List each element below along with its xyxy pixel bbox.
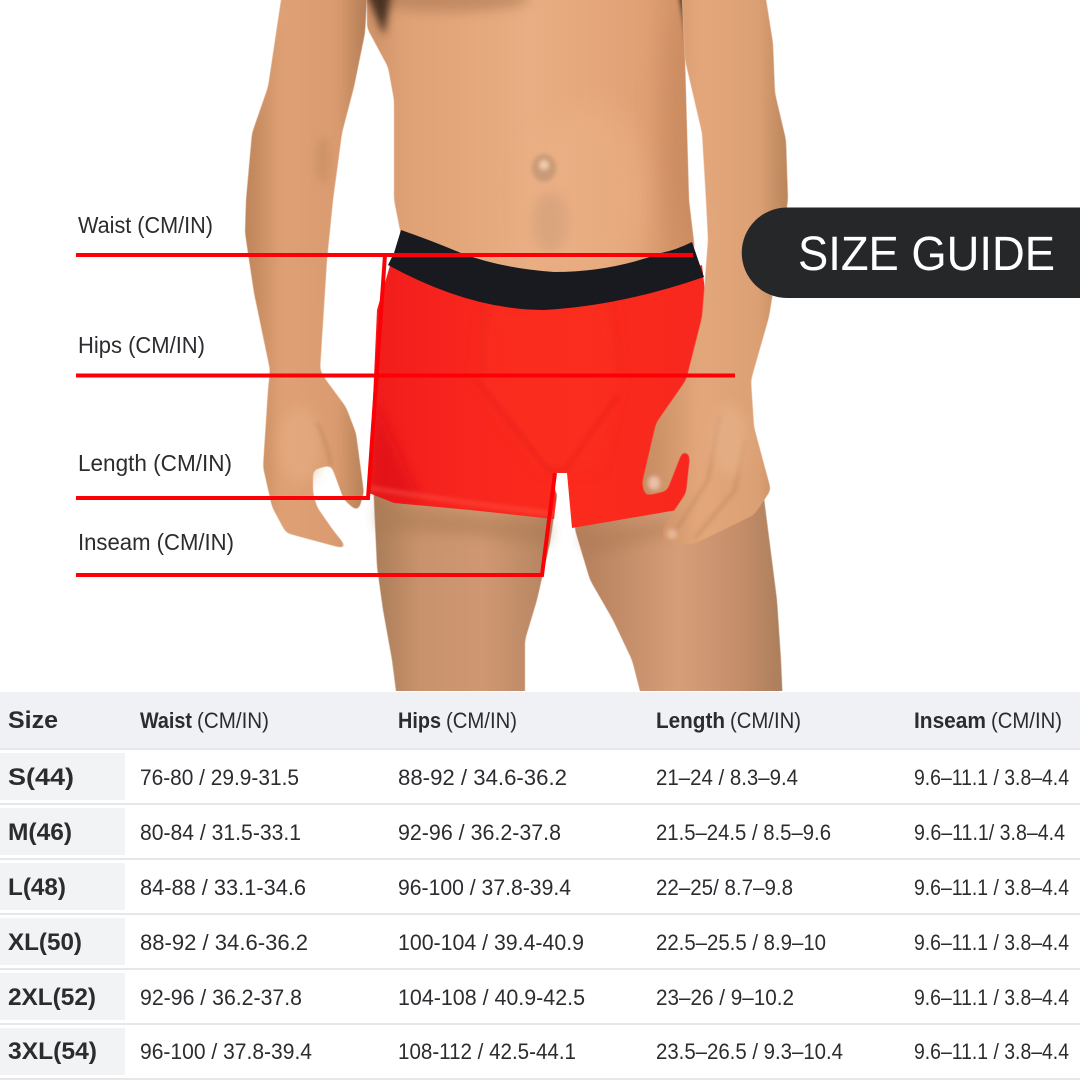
- row M(46): M(46): [8, 819, 72, 846]
- row 3XL(54): 96-100 / 37.8-39.4: [140, 1039, 312, 1064]
- row S(44): [0, 753, 1069, 800]
- row 2XL(52): 104-108 / 40.9-42.5: [398, 985, 585, 1010]
- red trunks: [369, 262, 706, 528]
- torso: [365, 0, 695, 285]
- row 2XL(52): [0, 973, 1069, 1020]
- row XL(50): 22.5–25.5 / 8.9–10: [656, 930, 826, 955]
- row M(46): 9.6–11.1/ 3.8–4.4: [914, 820, 1065, 845]
- row XL(50): [0, 918, 1069, 965]
- row 3XL(54): 108-112 / 42.5-44.1: [398, 1039, 576, 1064]
- table header: Length: [656, 708, 725, 733]
- row S(44): 21–24 / 8.3–9.4: [656, 765, 798, 790]
- row M(46): 92-96 / 36.2-37.8: [398, 820, 561, 845]
- waist line: [76, 253, 693, 257]
- label: inseam: Inseam (CM/IN): [78, 529, 234, 555]
- table header: Hips: [398, 708, 441, 733]
- label: length: Length (CM/IN): [78, 450, 232, 476]
- row M(46): 80-84 / 31.5-33.1: [140, 820, 301, 845]
- table header: (CM/IN): [730, 708, 801, 733]
- row L(48): [0, 863, 1069, 910]
- row L(48): 84-88 / 33.1-34.6: [140, 875, 306, 900]
- row 2XL(52): 2XL(52): [8, 984, 96, 1011]
- left arm and hand: [245, 0, 368, 550]
- badge title: SIZE GUIDE: [798, 228, 1055, 281]
- table header: (CM/IN): [197, 708, 269, 733]
- row 2XL(52): 92-96 / 36.2-37.8: [140, 985, 302, 1010]
- row M(46): 21.5–24.5 / 8.5–9.6: [656, 820, 831, 845]
- measurement lines: [76, 255, 735, 575]
- row S(44): S(44): [8, 764, 74, 791]
- label: hips: Hips (CM/IN): [78, 332, 205, 358]
- row M(46): [0, 808, 1065, 855]
- size guide badge: [742, 208, 1080, 298]
- left leg: [370, 490, 558, 691]
- table header: Waist: [140, 708, 193, 733]
- table header: (CM/IN): [991, 708, 1062, 733]
- size table: [0, 692, 1080, 1080]
- length line: [76, 255, 385, 498]
- row 3XL(54): 3XL(54): [8, 1038, 97, 1065]
- hips line: [76, 374, 735, 378]
- model photo: man wearing red trunks: [245, 0, 788, 730]
- right leg: [574, 499, 783, 691]
- row 2XL(52): 23–26 / 9–10.2: [656, 985, 794, 1010]
- icon: navel: [532, 154, 568, 252]
- row 3XL(54): [0, 1028, 1069, 1075]
- black waistband: [388, 230, 704, 310]
- measurement labels: [78, 212, 234, 555]
- row 3XL(54): 23.5–26.5 / 9.3–10.4: [656, 1039, 843, 1064]
- row XL(50): XL(50): [8, 929, 82, 956]
- table header: (CM/IN): [446, 708, 517, 733]
- table header: Size: [8, 707, 58, 734]
- row L(48): 22–25/ 8.7–9.8: [656, 875, 793, 900]
- row S(44): 88-92 / 34.6-36.2: [398, 765, 567, 790]
- table header: Inseam: [914, 708, 986, 733]
- row L(48): L(48): [8, 874, 66, 901]
- inseam line: [76, 473, 555, 575]
- row XL(50): 100-104 / 39.4-40.9: [398, 930, 584, 955]
- table header: [0, 692, 1080, 748]
- right arm and hand: [642, 0, 788, 544]
- row XL(50): 88-92 / 34.6-36.2: [140, 930, 308, 955]
- row L(48): 96-100 / 37.8-39.4: [398, 875, 571, 900]
- label: waist: Waist (CM/IN): [78, 212, 213, 238]
- row S(44): 76-80 / 29.9-31.5: [140, 765, 299, 790]
